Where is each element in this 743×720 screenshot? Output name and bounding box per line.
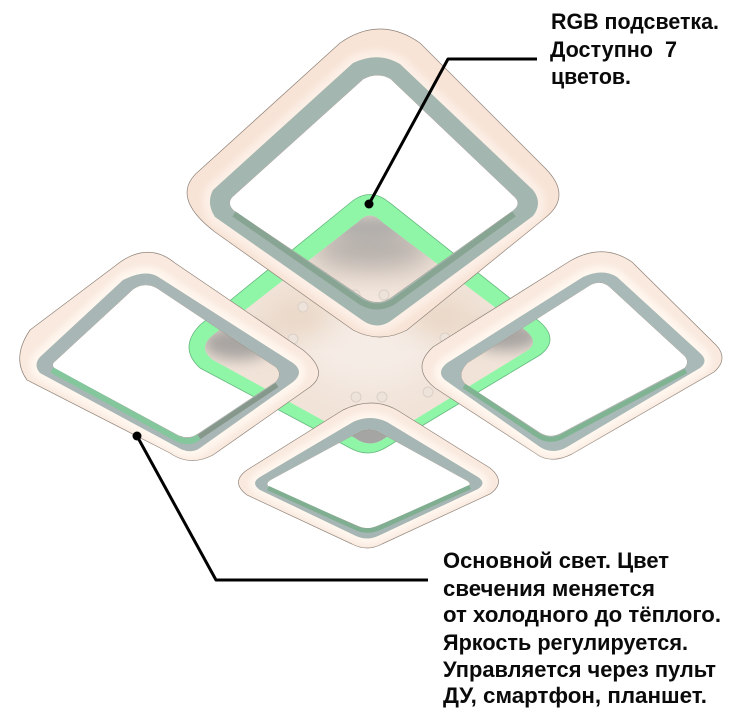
callout leader: main light [132, 432, 428, 580]
text block: RGB backlight: RGB подсветка. [551, 9, 719, 34]
text block: main light: ДУ, смартфон, планшет. [443, 683, 707, 708]
mounting screws [288, 290, 450, 402]
text block: RGB backlight: Доступно 7 [550, 37, 677, 62]
text block: main light: свечения меняется [443, 576, 655, 601]
callout leader: RGB backlight [364, 59, 537, 208]
text block: main light: от холодного до тёплого. [443, 602, 721, 627]
top ring [187, 29, 559, 337]
central mounting plate [202, 216, 541, 450]
green RGB backlight plate [189, 194, 550, 453]
text block: main light: Основной свет. Цвет [443, 548, 669, 573]
bottom ring [238, 403, 498, 548]
lamp: ceiling light illustration [20, 29, 722, 548]
text block: main light [443, 548, 721, 708]
left ring [20, 252, 319, 461]
right ring [422, 252, 722, 459]
text block: main light: Управляется через пульт [443, 657, 716, 682]
text block: RGB backlight: цветов. [551, 64, 631, 89]
text block: RGB backlight [550, 9, 719, 89]
text block: main light: Яркость регулируется. [443, 630, 688, 655]
